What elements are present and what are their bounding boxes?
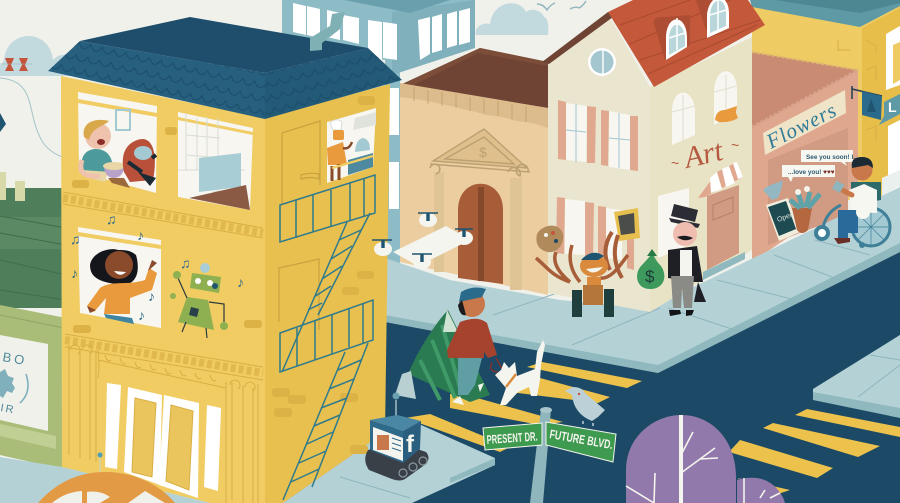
window: tv room — [178, 112, 253, 210]
music notes: ♫ — [180, 255, 190, 271]
fire escape — [280, 175, 375, 500]
sign: Flowers: Flowers — [761, 98, 841, 154]
front doors — [105, 383, 221, 498]
blue tower windows — [293, 3, 470, 209]
dog — [495, 340, 545, 405]
head — [580, 255, 608, 277]
frieze bands — [63, 198, 263, 373]
camera robot with profile card — [365, 392, 428, 480]
camera robot with profile card: f — [406, 431, 415, 458]
person in wheelchair — [782, 150, 890, 248]
cloud: top centre — [476, 3, 548, 35]
pilasters — [69, 345, 258, 503]
sign: present dr: PRESENT DR. — [486, 429, 538, 447]
flower pot and easel display: Open — [776, 211, 795, 224]
green robot — [170, 263, 228, 338]
orange cat — [715, 106, 738, 122]
red robot — [123, 139, 156, 186]
music notes: ♪ — [237, 274, 244, 290]
chimney vent — [310, 12, 345, 51]
speech bubbles — [782, 150, 859, 182]
robot artist with palette — [536, 208, 640, 317]
building: right yellow with teal roof — [750, 0, 900, 200]
building: flower shop — [752, 52, 900, 262]
lower balcony — [280, 300, 373, 372]
girl — [87, 249, 157, 324]
door step — [703, 252, 745, 280]
awning above sign shelf — [882, 170, 900, 196]
lower ladder — [283, 343, 368, 500]
drone — [372, 213, 473, 269]
tracks — [365, 442, 428, 480]
speech bubbles: ...love you! ♥♥♥ — [788, 169, 835, 176]
bank door — [458, 184, 503, 284]
boy walking dog — [395, 288, 545, 405]
right face arched windows — [672, 93, 695, 145]
art shop door — [707, 185, 739, 270]
purple tree — [626, 415, 785, 503]
upper ladder — [282, 213, 370, 372]
fallen tree — [395, 310, 490, 402]
window: chef robot — [327, 108, 376, 183]
sidewalk lower right of building — [283, 420, 495, 503]
decorative hanging cable and cut-off sign — [0, 78, 62, 157]
crosswalk stripes left — [405, 362, 642, 452]
coat — [668, 246, 703, 282]
building: bank — [400, 48, 548, 295]
picture frame — [614, 208, 640, 241]
bank pediment — [430, 129, 530, 172]
bank columns — [434, 172, 444, 272]
sidewalk lower-left — [0, 457, 210, 503]
sign: robo repair — [0, 335, 56, 449]
cloud: left with red bows — [0, 36, 72, 76]
right face — [265, 84, 390, 503]
round window — [588, 48, 616, 76]
head — [673, 222, 697, 246]
striped awning — [698, 162, 743, 198]
right yellow building windows — [882, 26, 900, 196]
shop windows — [768, 128, 848, 245]
sidewalk right — [813, 335, 900, 418]
profile card — [373, 427, 403, 461]
building: green left — [0, 172, 66, 470]
right face doors — [279, 121, 320, 330]
main yellow building — [48, 17, 402, 503]
building: cream house — [542, 0, 765, 312]
red roof — [608, 0, 765, 87]
hanging shop sign — [852, 86, 900, 125]
music notes: ♫ — [106, 211, 116, 227]
bank roof — [400, 48, 548, 108]
street sign — [483, 407, 616, 503]
body and tracks — [587, 277, 601, 285]
bank pediment: $ — [479, 144, 487, 160]
sign: Art — [671, 134, 739, 175]
orange umbrella — [38, 452, 175, 503]
upper balcony — [280, 175, 375, 242]
music notes: ♪ — [71, 265, 78, 281]
left face — [61, 76, 265, 503]
music notes: ♪ — [137, 227, 144, 243]
speech bubbles: See you soon! I... — [806, 154, 859, 161]
street — [283, 252, 900, 503]
flower pot and easel display — [763, 180, 820, 241]
sign: Art: Art — [679, 134, 727, 175]
music notes: ♪ — [148, 288, 155, 304]
window: man with red robot — [78, 92, 157, 193]
palette — [536, 226, 563, 252]
window: singing girl — [78, 227, 228, 338]
top-hat man with money bag — [637, 204, 706, 316]
crosswalk stripes right — [729, 409, 900, 495]
arms — [536, 245, 628, 282]
man — [81, 120, 130, 188]
money bag: $ — [645, 267, 655, 286]
shuttered windows upper — [558, 100, 638, 171]
building: blue background tower — [282, 0, 475, 280]
dormers — [654, 15, 690, 60]
sign: Art: ~ — [671, 155, 679, 171]
shuttered windows lower — [556, 197, 634, 270]
bank scalloped awning — [400, 83, 548, 128]
music notes — [70, 211, 244, 323]
art shop window — [658, 188, 689, 258]
pole — [530, 409, 551, 503]
music notes: ♪ — [138, 307, 145, 323]
roof — [48, 17, 402, 119]
sign: future blvd: FUTURE BLVD. — [548, 427, 614, 452]
hanging shop sign: L — [888, 99, 897, 115]
robot bird on street — [565, 387, 605, 426]
bricks — [72, 96, 375, 454]
blue bird on sign — [763, 180, 783, 200]
trousers — [671, 276, 694, 308]
sign: robo repair: BO — [1, 349, 29, 368]
music notes: ♫ — [70, 231, 80, 247]
birds — [537, 1, 586, 10]
leash — [491, 358, 504, 372]
hat — [671, 204, 698, 222]
sidewalk upper — [385, 187, 900, 373]
sign: Art: ~ — [731, 137, 739, 153]
